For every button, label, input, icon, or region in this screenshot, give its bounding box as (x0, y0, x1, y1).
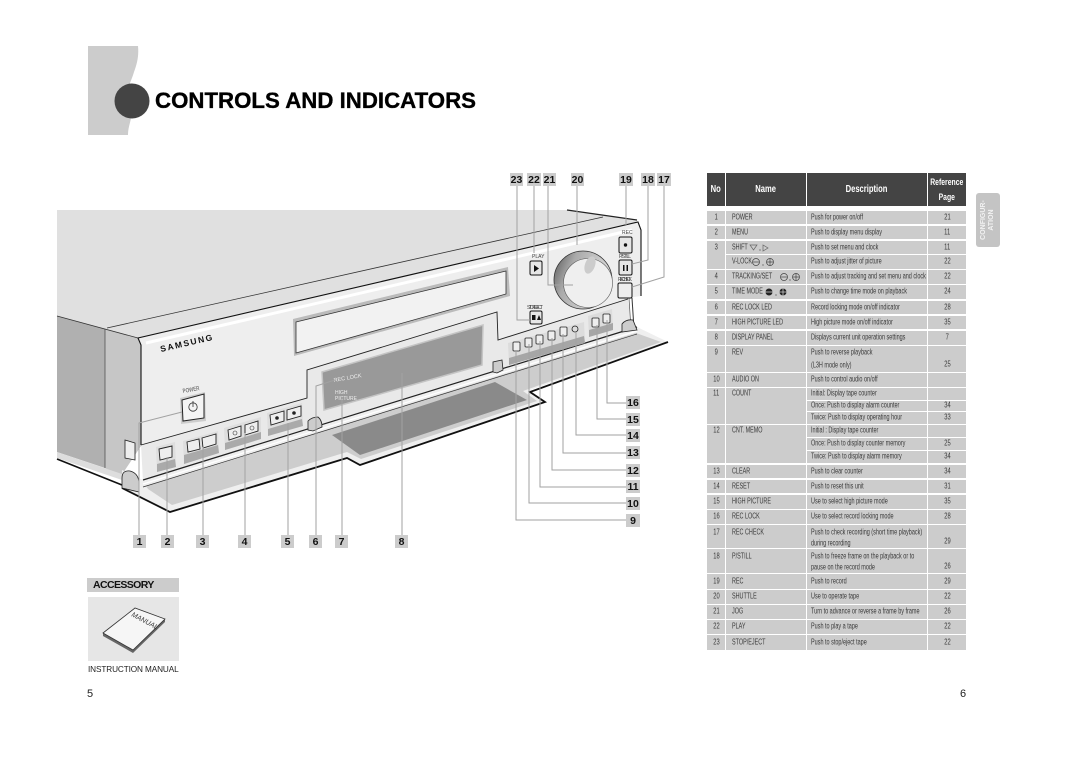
row 2: MENU (732, 227, 748, 236)
accessory heading (87, 578, 179, 592)
row 8: 7 (945, 332, 949, 341)
row 9 (707, 346, 966, 372)
row 17 (707, 525, 966, 548)
accessory illustration: manual: MANUAL (130, 612, 159, 632)
row 16: 28 (944, 511, 950, 520)
top surface of recorder (57, 210, 638, 338)
row 21: JOG (732, 606, 743, 615)
row 19: 29 (944, 576, 950, 585)
row 13: 34 (944, 466, 950, 475)
row 8: DISPLAY PANEL (732, 332, 773, 341)
table header: No (711, 184, 721, 195)
lower button panel (141, 298, 632, 482)
side of recorder (57, 316, 141, 485)
row 23: STOP/EJECT (732, 637, 765, 646)
row 18 (707, 549, 966, 573)
row 16: REC LOCK (732, 511, 760, 520)
table header (707, 173, 966, 206)
samsung logo: SAMSUNG (159, 332, 215, 354)
row 4: TRACKING/SET (732, 271, 772, 280)
right small buttons strip (508, 309, 613, 365)
row 7: 7 (714, 317, 718, 326)
row 16: 16 (713, 511, 719, 520)
number callouts: 1 (137, 536, 143, 548)
row 3 (707, 241, 966, 269)
row 2 (707, 226, 966, 239)
row 12: 34 (944, 451, 950, 460)
row 20: 22 (944, 591, 950, 600)
row 6: 6 (714, 302, 718, 311)
row 23 (707, 635, 966, 650)
number callouts: 2 (165, 536, 171, 548)
row 22 (707, 620, 966, 634)
number callouts: 9 (630, 515, 636, 527)
row 2: 2 (714, 227, 718, 236)
row 7 (707, 316, 966, 329)
row 2: Push to display menu display (811, 227, 882, 236)
row 6 (707, 301, 966, 314)
row 10 (707, 373, 966, 387)
row 19: 19 (713, 576, 719, 585)
row 16 (707, 510, 966, 524)
row 23: 23 (713, 637, 719, 646)
row 21: 21 (713, 606, 719, 615)
accessory caption: INSTRUCTION MANUAL (88, 665, 179, 674)
number callouts: 16 (627, 397, 639, 409)
display panel: HIGH (335, 390, 348, 396)
number callouts: 18 (642, 174, 654, 186)
row 17: REC CHECK (732, 527, 764, 536)
row 9: Push to reverse playback (811, 347, 873, 356)
row 21 (707, 605, 966, 619)
number callouts (133, 173, 671, 548)
leader lines (139, 186, 664, 535)
hinges (122, 320, 637, 492)
row 11 (707, 388, 966, 424)
row 10: AUDIO ON (732, 374, 759, 383)
row 8 (707, 331, 966, 345)
number callouts: 4 (242, 536, 248, 548)
row 1: 1 (714, 212, 718, 221)
row 14: RESET (732, 481, 750, 490)
side tab: configuration (976, 193, 1000, 247)
row 17: 17 (713, 527, 719, 536)
row 4: 4 (714, 271, 718, 280)
left buttons: menu, shift, tracking, time mode (156, 403, 303, 472)
transport buttons: rec, still, rec check, play, stop (530, 237, 632, 324)
row 8: 8 (714, 332, 718, 341)
side tab: configuration: CONFIGUR- (980, 200, 987, 240)
row 19: REC (732, 576, 743, 585)
front face (138, 222, 641, 445)
row 3: V-LOCK (732, 256, 752, 265)
row 19 (707, 574, 966, 589)
transport button glyphs: STOP/EJECT (527, 305, 543, 311)
row 9: (L3H mode only) (811, 360, 852, 369)
accessory illustration: manual (88, 597, 179, 661)
row 22: Push to play a tape (811, 621, 858, 630)
display panel: PICTURE (335, 396, 358, 402)
number callouts: 12 (627, 465, 639, 477)
page number right: 6 (960, 688, 966, 700)
row 3: Push to adjust jitter of picture (811, 256, 882, 265)
transport button glyphs (527, 230, 633, 320)
tape slot (293, 267, 510, 356)
number callouts: 8 (399, 536, 405, 548)
number callouts: 10 (627, 498, 639, 510)
row 12: Once: Push to display counter memory (811, 438, 905, 447)
row 13: 13 (713, 466, 719, 475)
row 18: P/STILL (732, 551, 752, 560)
number callouts: 19 (620, 174, 632, 186)
row 2: 11 (944, 227, 950, 236)
number callouts: 3 (200, 536, 206, 548)
number callouts: 7 (339, 536, 345, 548)
row 15: 35 (944, 496, 950, 505)
row 9: 9 (714, 347, 718, 356)
number callouts: 13 (627, 447, 639, 459)
number callouts: 23 (511, 174, 522, 186)
row 12 (707, 425, 966, 463)
row 10: 10 (713, 374, 719, 383)
transport button glyphs: REC (622, 230, 633, 236)
table header: Page (939, 192, 955, 202)
row 17: during recording (811, 538, 851, 547)
number callouts: 11 (627, 481, 639, 493)
number callouts: 15 (627, 414, 639, 426)
row 6: 28 (944, 302, 950, 311)
row 4: Push to adjust tracking and set menu and clock (811, 271, 926, 280)
number callouts: 21 (544, 174, 555, 186)
accessory heading: ACCESSORY (93, 579, 154, 591)
page number left: 5 (87, 688, 93, 700)
row 15: HIGH PICTURE (732, 496, 771, 505)
row 18: Push to freeze frame on the playback or to (811, 551, 914, 560)
number callouts: 6 (313, 536, 319, 548)
row 11: Initial: Display tape counter (811, 388, 877, 397)
row 3: 3 (714, 242, 718, 251)
row 14: 14 (713, 481, 719, 490)
row 6: REC LOCK LED (732, 302, 772, 311)
row 15: Use to select high picture mode (811, 496, 888, 505)
row 1: Push for power on/off (811, 212, 863, 221)
number callouts: 17 (658, 174, 670, 186)
row 11: 33 (944, 412, 950, 421)
row 13 (707, 465, 966, 478)
transport button glyphs: REC CHECK (618, 277, 633, 283)
row 3: 22 (944, 256, 950, 265)
table header: Description (846, 184, 888, 195)
row 11: Twice: Push to display operating hour (811, 412, 902, 421)
row 4 (707, 270, 966, 284)
row 20: SHUTTLE (732, 591, 757, 600)
row 1: POWER (732, 212, 753, 221)
row 18: 18 (713, 551, 719, 560)
row 15: 15 (713, 496, 719, 505)
row 22: 22 (944, 621, 950, 630)
row 18: 26 (944, 561, 950, 570)
number callouts: 22 (528, 174, 540, 186)
row 5: 5 (714, 286, 718, 295)
row 12: CNT. MEMO (732, 425, 763, 434)
row 3: SHIFT (732, 242, 748, 251)
row 21: Turn to advance or reverse a frame by frame (811, 606, 920, 615)
transport button glyphs: PLAY (532, 254, 545, 260)
jog and shuttle dial (554, 251, 612, 309)
row 20: Use to operate tape (811, 591, 859, 600)
transport button glyphs: P/STILL (619, 254, 631, 260)
row 1: 21 (944, 212, 950, 221)
table header: Reference (930, 177, 963, 187)
row 5: TIME MODE (732, 286, 763, 295)
number callouts: 20 (572, 174, 583, 186)
row 12: 12 (713, 425, 719, 434)
row 19: Push to record (811, 576, 847, 585)
row 13: CLEAR (732, 466, 750, 475)
row 17: Push to check recording (short time playback) (811, 527, 922, 536)
row 9: REV (732, 347, 743, 356)
row 17: 29 (944, 536, 950, 545)
row 8: Displays current unit operation settings (811, 332, 905, 341)
display panel (322, 325, 483, 410)
row 22: 22 (713, 621, 719, 630)
row 14 (707, 480, 966, 493)
row 13: Push to clear counter (811, 466, 863, 475)
row 21: 26 (944, 606, 950, 615)
row 23: 22 (944, 637, 950, 646)
power button (180, 386, 206, 424)
power button: POWER (182, 386, 201, 395)
row 23: Push to stop/eject tape (811, 637, 867, 646)
row 9: 25 (944, 359, 950, 368)
row 1 (707, 211, 966, 224)
title: CONTROLS AND INDICATORS (155, 88, 476, 113)
row 11: 11 (713, 388, 719, 397)
row 18: pause on the record mode (811, 562, 875, 571)
row 3: 11 (944, 242, 950, 251)
row 14: 31 (944, 481, 950, 490)
row 20: 20 (713, 591, 719, 600)
row 12: Twice: Push to display alarm memory (811, 451, 902, 460)
flap inner panel (332, 382, 527, 455)
row 3: Push to set menu and clock (811, 242, 878, 251)
row 6: Record locking mode on/off indicator (811, 302, 900, 311)
row 10: Push to control audio on/off (811, 374, 878, 383)
row 5: Push to change time mode on playback (811, 286, 907, 295)
row 7: 35 (944, 317, 950, 326)
row 5: 24 (944, 286, 950, 295)
row 7: HIGH PICTURE LED (732, 317, 783, 326)
row 4: 22 (944, 271, 950, 280)
row 15 (707, 495, 966, 509)
row 16: Use to select record locking mode (811, 511, 894, 520)
row 20 (707, 590, 966, 604)
row 11: COUNT (732, 388, 751, 397)
row 12: 25 (944, 438, 950, 447)
row 12: Initial : Display tape counter (811, 425, 878, 434)
display panel: REC LOCK (333, 373, 362, 384)
number callouts: 14 (627, 430, 639, 442)
row 14: Push to reset this unit (811, 481, 864, 490)
row 5 (707, 285, 966, 299)
side tab: configuration: ATION (988, 209, 995, 231)
flap door (122, 298, 668, 512)
number callouts: 5 (285, 536, 291, 548)
table header: Name (756, 184, 776, 195)
row 22: PLAY (732, 621, 746, 630)
row 7: High picture mode on/off indicator (811, 317, 893, 326)
